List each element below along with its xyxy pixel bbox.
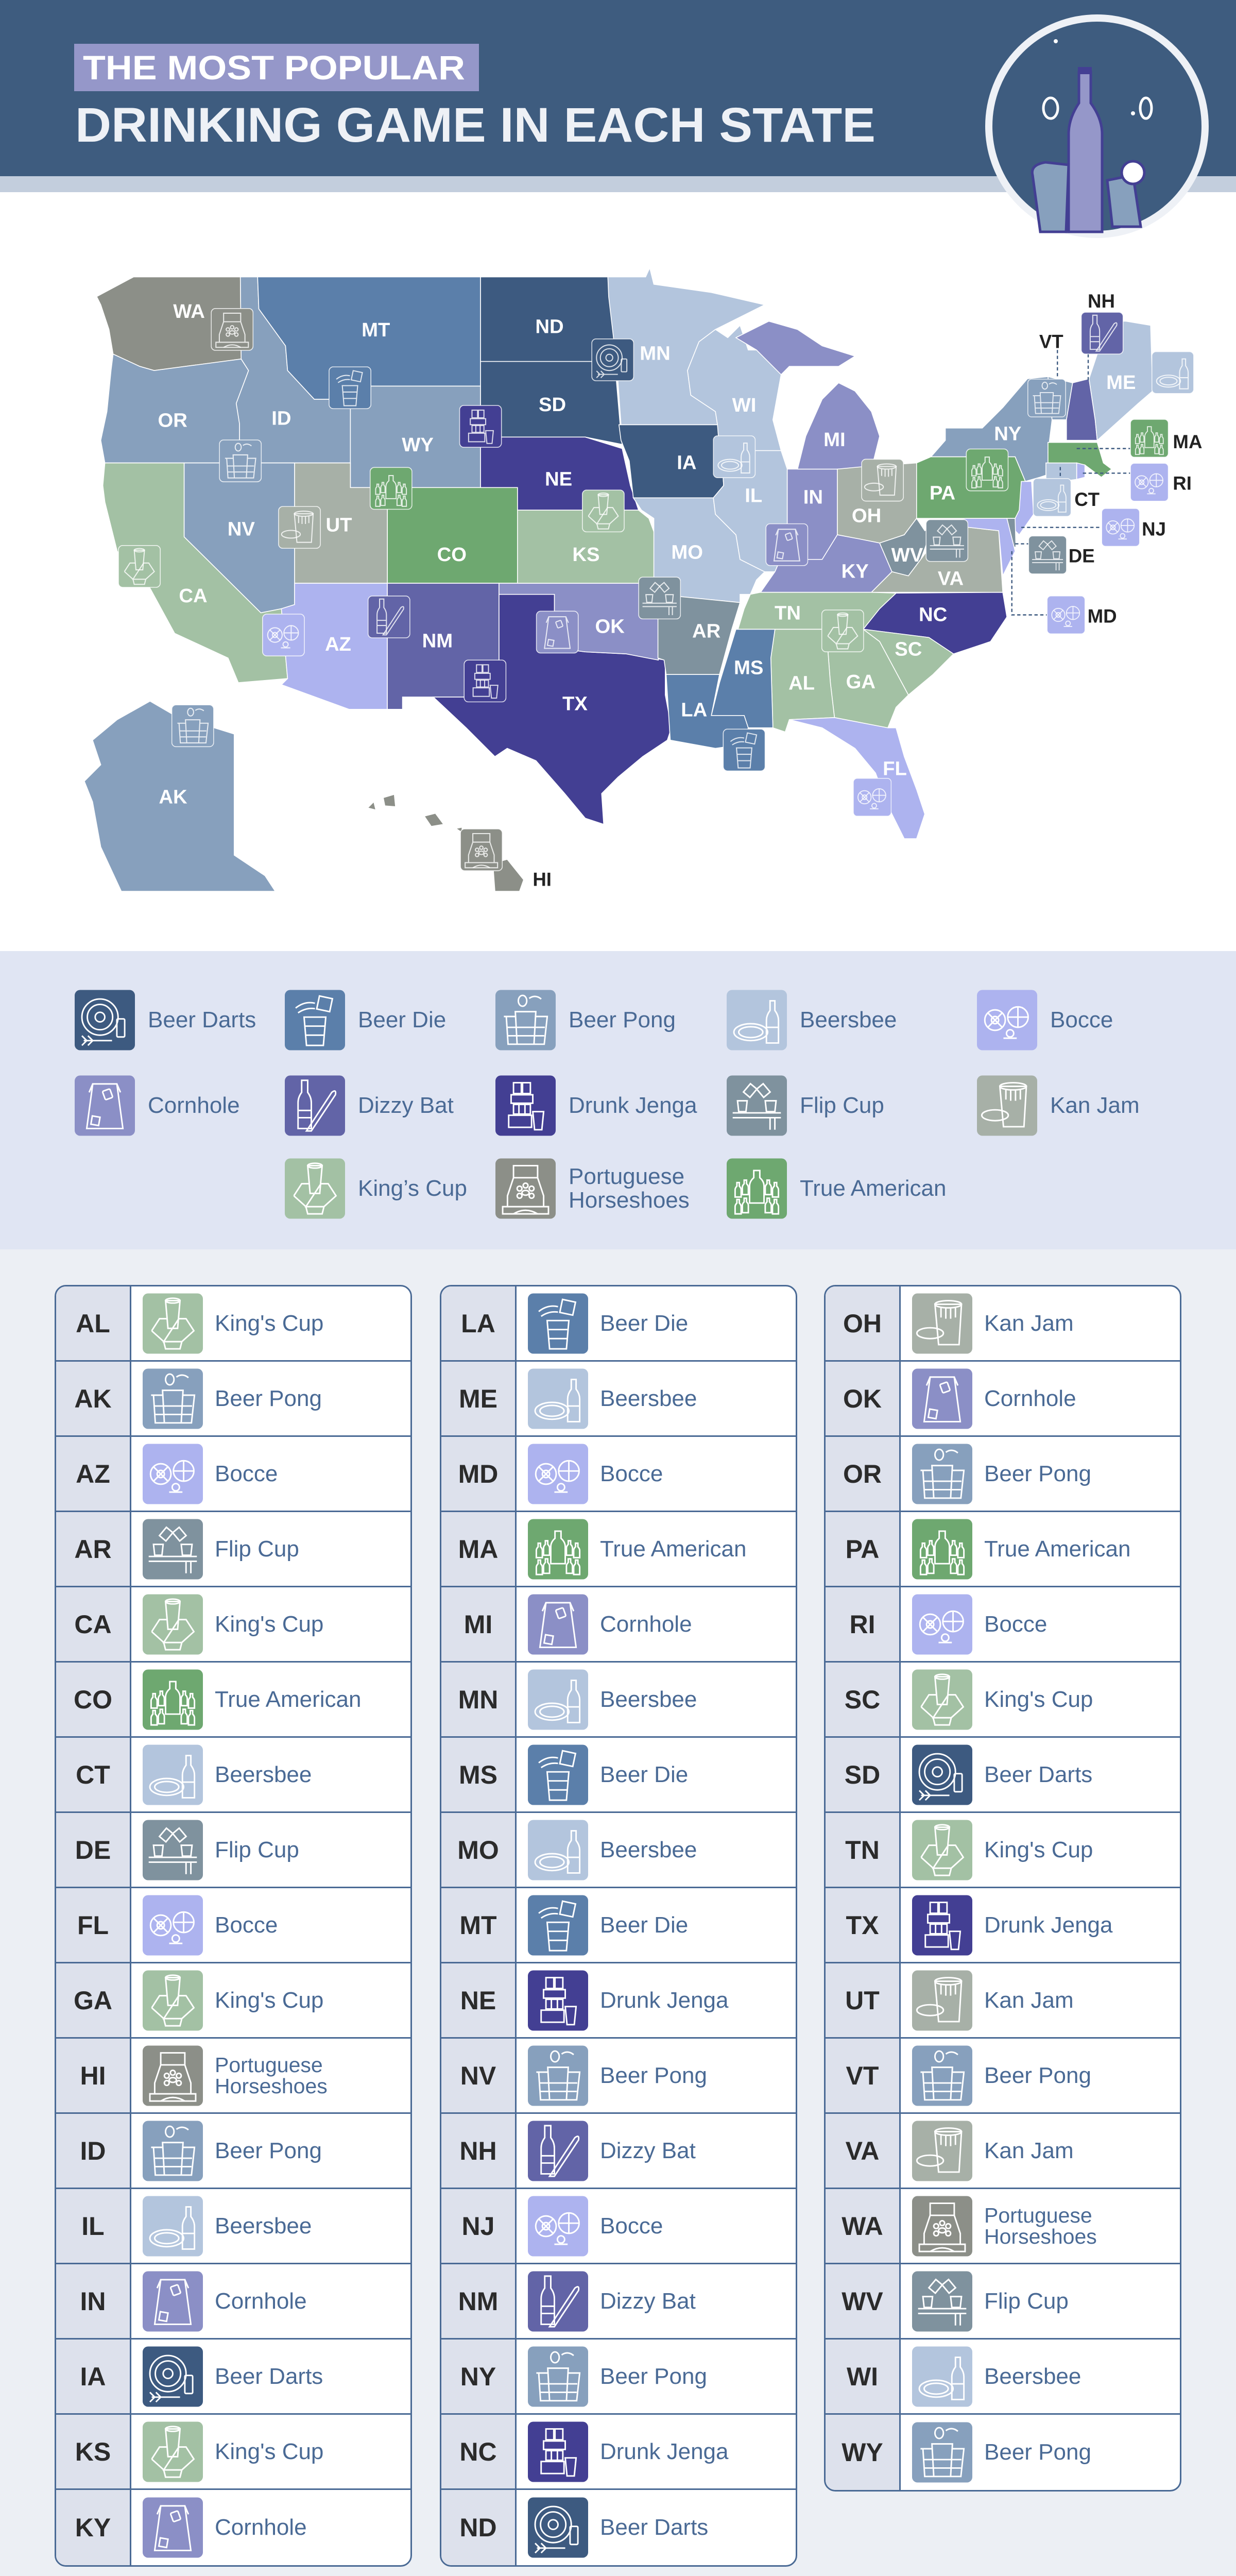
row VT <box>826 2039 1180 2114</box>
legend: Beer Die: Beer Die <box>358 1007 446 1032</box>
row MS: MS <box>459 1760 497 1789</box>
western states: SD <box>539 394 566 416</box>
row KS: KS <box>75 2437 111 2466</box>
eastern states: IN <box>803 486 823 508</box>
map icons east <box>639 312 1194 816</box>
legend: True American: True American <box>800 1176 946 1201</box>
western states: KS <box>572 544 600 566</box>
row OR: Beer Pong <box>984 1461 1091 1486</box>
row NJ <box>441 2189 796 2264</box>
western states: CA <box>179 585 208 607</box>
row CO <box>56 1663 410 1738</box>
row HI: HI <box>80 2061 106 2090</box>
legend: Beer Darts <box>75 990 256 1050</box>
row UT: Kan Jam <box>984 1988 1074 2012</box>
row IA <box>56 2340 410 2415</box>
row OH: OH <box>843 1309 882 1337</box>
eastern states: ME <box>1106 371 1136 394</box>
row UT: UT <box>845 1986 880 2014</box>
western states: WA <box>173 300 205 323</box>
row CO: CO <box>74 1685 112 1714</box>
header band <box>0 0 1236 192</box>
row ID: ID <box>80 2136 106 2165</box>
row MN: Beersbee <box>600 1687 697 1711</box>
row NE <box>441 1963 796 2039</box>
eastern states: KY <box>842 561 869 583</box>
row SC: King's Cup <box>984 1687 1093 1711</box>
western states: NV <box>228 518 255 540</box>
table column 3 <box>824 1285 1181 2492</box>
eastern states: MD <box>1088 606 1117 627</box>
row PA: True American <box>984 1536 1130 1561</box>
row VA: VA <box>846 2136 879 2165</box>
row KY: Cornhole <box>215 2515 307 2540</box>
eastern states: NY <box>994 423 1021 445</box>
row WV <box>826 2264 1180 2340</box>
row AR: Flip Cup <box>215 1536 299 1561</box>
row CT: CT <box>76 1760 110 1789</box>
row WI: Beersbee <box>984 2364 1081 2388</box>
row WA: WA <box>842 2211 883 2240</box>
eastern states: VA <box>938 567 964 589</box>
header illustration: bottle and cups <box>985 14 1209 238</box>
row MS <box>441 1738 796 1813</box>
row KY <box>56 2490 307 2565</box>
row NJ: Bocce <box>600 2213 663 2238</box>
western states: WY <box>402 434 434 456</box>
row KY: KY <box>75 2513 111 2542</box>
row SD: Beer Darts <box>984 1762 1092 1787</box>
row LA <box>441 1286 796 1362</box>
row NH: Dizzy Bat <box>600 2138 696 2163</box>
row WY: WY <box>842 2438 883 2467</box>
row ME <box>441 1362 796 1437</box>
legend: Drunk Jenga: Drunk Jenga <box>569 1093 697 1118</box>
row MO <box>441 1813 796 1888</box>
row SD <box>826 1738 1180 1813</box>
row CA: CA <box>74 1609 112 1638</box>
legend: Beer Pong: Beer Pong <box>569 1007 676 1032</box>
eastern states: MN <box>640 342 671 364</box>
row NY <box>441 2340 796 2415</box>
row NJ: NJ <box>462 2211 494 2240</box>
row NV <box>441 2039 796 2114</box>
eastern states: CT <box>1074 489 1100 510</box>
legend: Portuguese Horseshoes: Horseshoes <box>569 1188 690 1213</box>
row TX: Drunk Jenga <box>984 1912 1112 1937</box>
eastern states: NC <box>919 603 947 625</box>
eastern states: TN <box>775 602 801 624</box>
row AL <box>56 1286 410 1362</box>
western states: AZ <box>325 633 351 655</box>
row NY: Beer Pong <box>600 2364 707 2388</box>
row MO: MO <box>457 1835 499 1864</box>
row IN <box>56 2264 410 2340</box>
row TN: King's Cup <box>984 1837 1093 1862</box>
row KS <box>56 2415 410 2490</box>
eastern states: WV <box>891 544 923 566</box>
row MI: MI <box>464 1609 492 1638</box>
row CT <box>56 1738 410 1813</box>
legend: Beersbee: Beersbee <box>800 1007 897 1032</box>
legend: Kan Jam: Kan Jam <box>1050 1093 1140 1118</box>
eastern states: MO <box>671 541 703 563</box>
western states: NM <box>422 630 453 652</box>
row MA: True American <box>600 1536 746 1561</box>
legend panel <box>0 951 1236 1249</box>
row MT <box>441 1888 796 1963</box>
row IA: IA <box>80 2362 106 2391</box>
row ND: Beer Darts <box>600 2515 708 2540</box>
row NC: Drunk Jenga <box>600 2439 728 2464</box>
eastern states: AL <box>788 672 815 694</box>
row MT: MT <box>459 1910 497 1939</box>
eastern states <box>608 268 1202 839</box>
row WA: Portuguese <box>984 2203 1092 2227</box>
row LA: Beer Die <box>600 1311 688 1335</box>
row NE: Drunk Jenga <box>600 1988 728 2012</box>
row AK: AK <box>74 1384 112 1413</box>
row AK <box>56 1362 410 1437</box>
eastern states: FL <box>883 757 907 779</box>
row VT: Beer Pong <box>984 2063 1091 2088</box>
row MD: MD <box>458 1459 498 1488</box>
row WV: WV <box>842 2286 883 2315</box>
eastern states: IL <box>745 484 762 506</box>
row MT: Beer Die <box>600 1912 688 1937</box>
eastern states: PA <box>930 482 955 504</box>
row MS: Beer Die <box>600 1762 688 1787</box>
row CT: Beersbee <box>215 1762 312 1787</box>
western states: ID <box>271 407 291 429</box>
row NM: Dizzy Bat <box>600 2289 696 2313</box>
row WY: Beer Pong <box>984 2439 1091 2465</box>
row AR <box>56 1512 410 1587</box>
western states: MT <box>362 319 390 341</box>
western states: AK <box>159 786 187 808</box>
map icons west <box>118 309 633 871</box>
row GA: King's Cup <box>215 1988 323 2012</box>
row NH: NH <box>459 2136 497 2165</box>
eastern states: GA <box>846 671 876 693</box>
western states: CO <box>437 544 467 566</box>
row CA <box>56 1587 410 1663</box>
row WI <box>826 2340 1180 2415</box>
row OR: OR <box>843 1459 882 1488</box>
row TX <box>826 1888 1180 1963</box>
row RI: Bocce <box>984 1612 1047 1636</box>
row AL: AL <box>76 1309 110 1337</box>
row VA: Kan Jam <box>984 2138 1074 2163</box>
row ME: Beersbee <box>600 1386 697 1411</box>
row AK: Beer Pong <box>215 1386 322 1411</box>
map of US states <box>84 269 1202 891</box>
table column 1 <box>55 1285 412 2567</box>
eastern states: AR <box>692 620 720 642</box>
eastern states: RI <box>1173 472 1192 494</box>
leader lines <box>1012 350 1130 615</box>
row MA <box>441 1512 796 1587</box>
western states: OK <box>595 616 625 638</box>
legend: Bocce: Bocce <box>1050 1007 1113 1032</box>
eastern states: DE <box>1069 545 1095 566</box>
row MD <box>441 1437 796 1512</box>
row LA: LA <box>461 1309 495 1337</box>
row OK: OK <box>843 1384 882 1413</box>
row SD: SD <box>845 1760 880 1789</box>
row TN <box>826 1813 1180 1888</box>
title line 1 <box>74 44 479 91</box>
western states <box>84 277 672 891</box>
row DE <box>56 1813 410 1888</box>
row IL: IL <box>81 2211 105 2240</box>
row MI <box>441 1587 796 1663</box>
eastern states: MA <box>1173 431 1202 452</box>
legend: Beersbee <box>727 990 897 1050</box>
legend: Portuguese Horseshoes <box>495 1158 690 1219</box>
table column 2 <box>440 1285 797 2567</box>
eastern states: NH <box>1088 291 1115 312</box>
row FL <box>56 1888 410 1963</box>
row MN <box>441 1663 796 1738</box>
row IN: IN <box>80 2286 106 2315</box>
row WY <box>826 2415 1091 2490</box>
row OK <box>826 1362 1180 1437</box>
legend: Flip Cup: Flip Cup <box>800 1093 884 1118</box>
row NE: NE <box>460 1986 496 2014</box>
row IL: Beersbee <box>215 2213 312 2238</box>
row AZ: Bocce <box>215 1461 278 1486</box>
row NH <box>441 2114 796 2189</box>
row AR: AR <box>74 1534 112 1563</box>
row OH <box>826 1286 1180 1362</box>
eastern states: OH <box>852 504 881 527</box>
row NM <box>441 2264 796 2340</box>
legend: Dizzy Bat <box>285 1076 454 1136</box>
row WV: Flip Cup <box>984 2289 1069 2313</box>
legend: Kan Jam <box>977 1076 1140 1136</box>
row NC <box>441 2415 796 2490</box>
row ND: ND <box>459 2513 497 2542</box>
legend: Cornhole: Cornhole <box>148 1093 240 1118</box>
row RI <box>826 1587 1180 1663</box>
row VA <box>826 2114 1180 2189</box>
row FL: FL <box>77 1910 109 1939</box>
row IL <box>56 2189 410 2264</box>
row WA: Horseshoes <box>984 2225 1097 2248</box>
western states: HI <box>533 869 552 890</box>
row DE: DE <box>75 1835 111 1864</box>
row HI: Portuguese <box>215 2053 323 2076</box>
eastern states: MI <box>823 429 846 451</box>
row AL: King's Cup <box>215 1311 323 1335</box>
row ID: Beer Pong <box>215 2138 322 2163</box>
eastern states: IA <box>677 451 696 473</box>
row VT: VT <box>846 2061 879 2090</box>
row NV: Beer Pong <box>600 2063 707 2088</box>
row RI: RI <box>850 1609 876 1638</box>
row AZ: AZ <box>76 1459 110 1488</box>
legend: Beer Die <box>285 990 446 1050</box>
eastern states: WI <box>732 394 756 416</box>
legend: Beer Pong <box>495 990 676 1050</box>
row IA: Beer Darts <box>215 2364 323 2388</box>
row DE: Flip Cup <box>215 1837 299 1862</box>
eastern states: LA <box>681 699 707 721</box>
legend: Bocce <box>977 990 1113 1050</box>
row WI: WI <box>847 2362 878 2391</box>
legend: Flip Cup <box>727 1076 884 1136</box>
row GA <box>56 1963 410 2039</box>
eastern states: NJ <box>1142 519 1166 540</box>
row SC <box>826 1663 1180 1738</box>
row PA: PA <box>846 1534 879 1563</box>
title line 1: THE MOST POPULAR <box>83 48 465 87</box>
row AZ <box>56 1437 410 1512</box>
row GA: GA <box>74 1986 112 2014</box>
row MN: MN <box>458 1685 498 1714</box>
legend: Dizzy Bat: Dizzy Bat <box>358 1093 454 1118</box>
eastern states: SC <box>895 638 922 660</box>
eastern states: VT <box>1039 331 1063 352</box>
legend: True American <box>727 1158 946 1219</box>
legend: Beer Darts: Beer Darts <box>148 1007 256 1032</box>
row FL: Bocce <box>215 1912 278 1937</box>
row MO: Beersbee <box>600 1837 697 1862</box>
row UT <box>826 1963 1180 2039</box>
row ID <box>56 2114 410 2189</box>
row IN: Cornhole <box>215 2289 307 2313</box>
row SC: SC <box>845 1685 880 1714</box>
row HI <box>56 2039 410 2114</box>
row KS: King's Cup <box>215 2439 323 2464</box>
row HI: Horseshoes <box>215 2074 328 2098</box>
row WA <box>826 2189 1180 2264</box>
row CO: True American <box>215 1687 361 1711</box>
row MI: Cornhole <box>600 1612 692 1636</box>
row ME: ME <box>459 1384 497 1413</box>
row PA <box>826 1512 1180 1587</box>
western states: OR <box>158 409 187 431</box>
row TN: TN <box>845 1835 880 1864</box>
row MA: MA <box>458 1534 498 1563</box>
legend: King's Cup <box>285 1158 467 1219</box>
row OK: Cornhole <box>984 1386 1076 1411</box>
western states: ND <box>535 316 564 338</box>
western states: UT <box>326 514 352 536</box>
row NM: NM <box>458 2286 498 2315</box>
row NC: NC <box>459 2437 497 2466</box>
legend: Portuguese Horseshoes: Portuguese <box>569 1164 684 1189</box>
legend: Cornhole <box>75 1076 240 1136</box>
row ND <box>441 2490 708 2565</box>
title line 2: DRINKING GAME IN EACH STATE <box>75 98 876 152</box>
western states: TX <box>562 692 588 715</box>
row NY: NY <box>460 2362 496 2391</box>
row OH: Kan Jam <box>984 1311 1074 1335</box>
row CA: King's Cup <box>215 1612 323 1636</box>
western states: NE <box>545 468 572 490</box>
row MD: Bocce <box>600 1461 663 1486</box>
row OR <box>826 1437 1180 1512</box>
legend: Drunk Jenga <box>495 1076 697 1136</box>
row NV: NV <box>460 2061 496 2090</box>
eastern states: MS <box>734 656 763 679</box>
legend: King's Cup: King’s Cup <box>358 1176 467 1201</box>
row TX: TX <box>846 1910 879 1939</box>
map background (white) <box>0 176 1236 951</box>
